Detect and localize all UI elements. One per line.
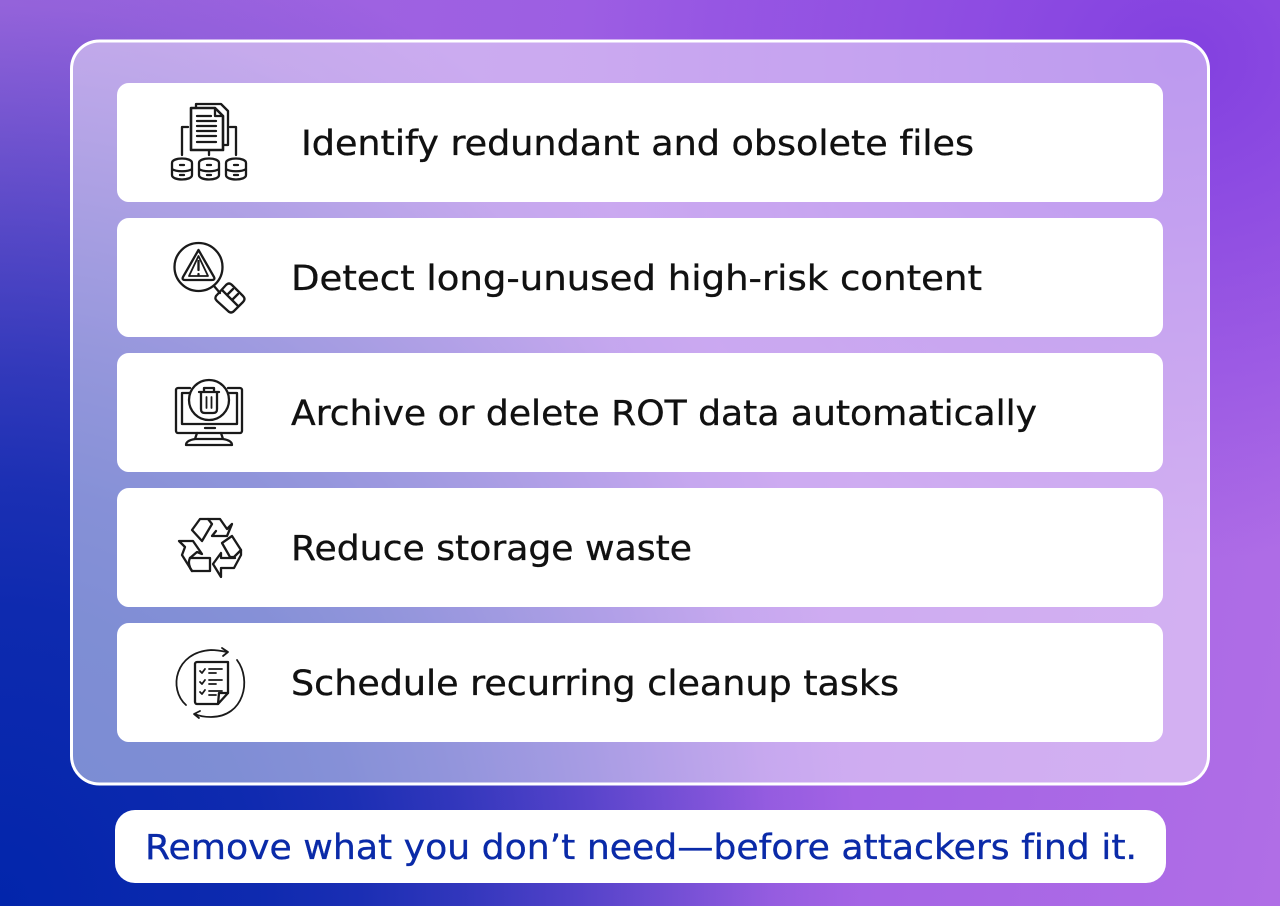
icon: checklist in circular arrows	[176, 648, 244, 718]
row 3: archive or delete	[117, 353, 1163, 472]
text: reduce: Reduce storage waste	[291, 529, 692, 569]
text: archive: Archive or delete ROT data automatically	[291, 394, 1037, 434]
icon: recycle arrows	[179, 519, 241, 577]
row 5: schedule cleanup	[117, 623, 1163, 742]
row 4: reduce storage waste	[117, 488, 1163, 607]
text: detect: Detect long-unused high-risk content	[291, 259, 982, 299]
icon: monitor with trash can	[176, 380, 242, 445]
row 1: identify files	[117, 83, 1163, 202]
callout: bottom tagline	[115, 810, 1166, 883]
text: schedule: Schedule recurring cleanup tasks	[291, 664, 899, 704]
row 2: detect content	[117, 218, 1163, 337]
panel: main translucent container	[72, 41, 1208, 784]
text: identify: Identify redundant and obsolete files	[301, 124, 974, 164]
icon: magnifier with warning	[174, 243, 244, 312]
icon: documents and databases	[172, 104, 246, 180]
callout: bottom tagline: Remove what you don’t need—before attackers find it.	[145, 828, 1137, 868]
